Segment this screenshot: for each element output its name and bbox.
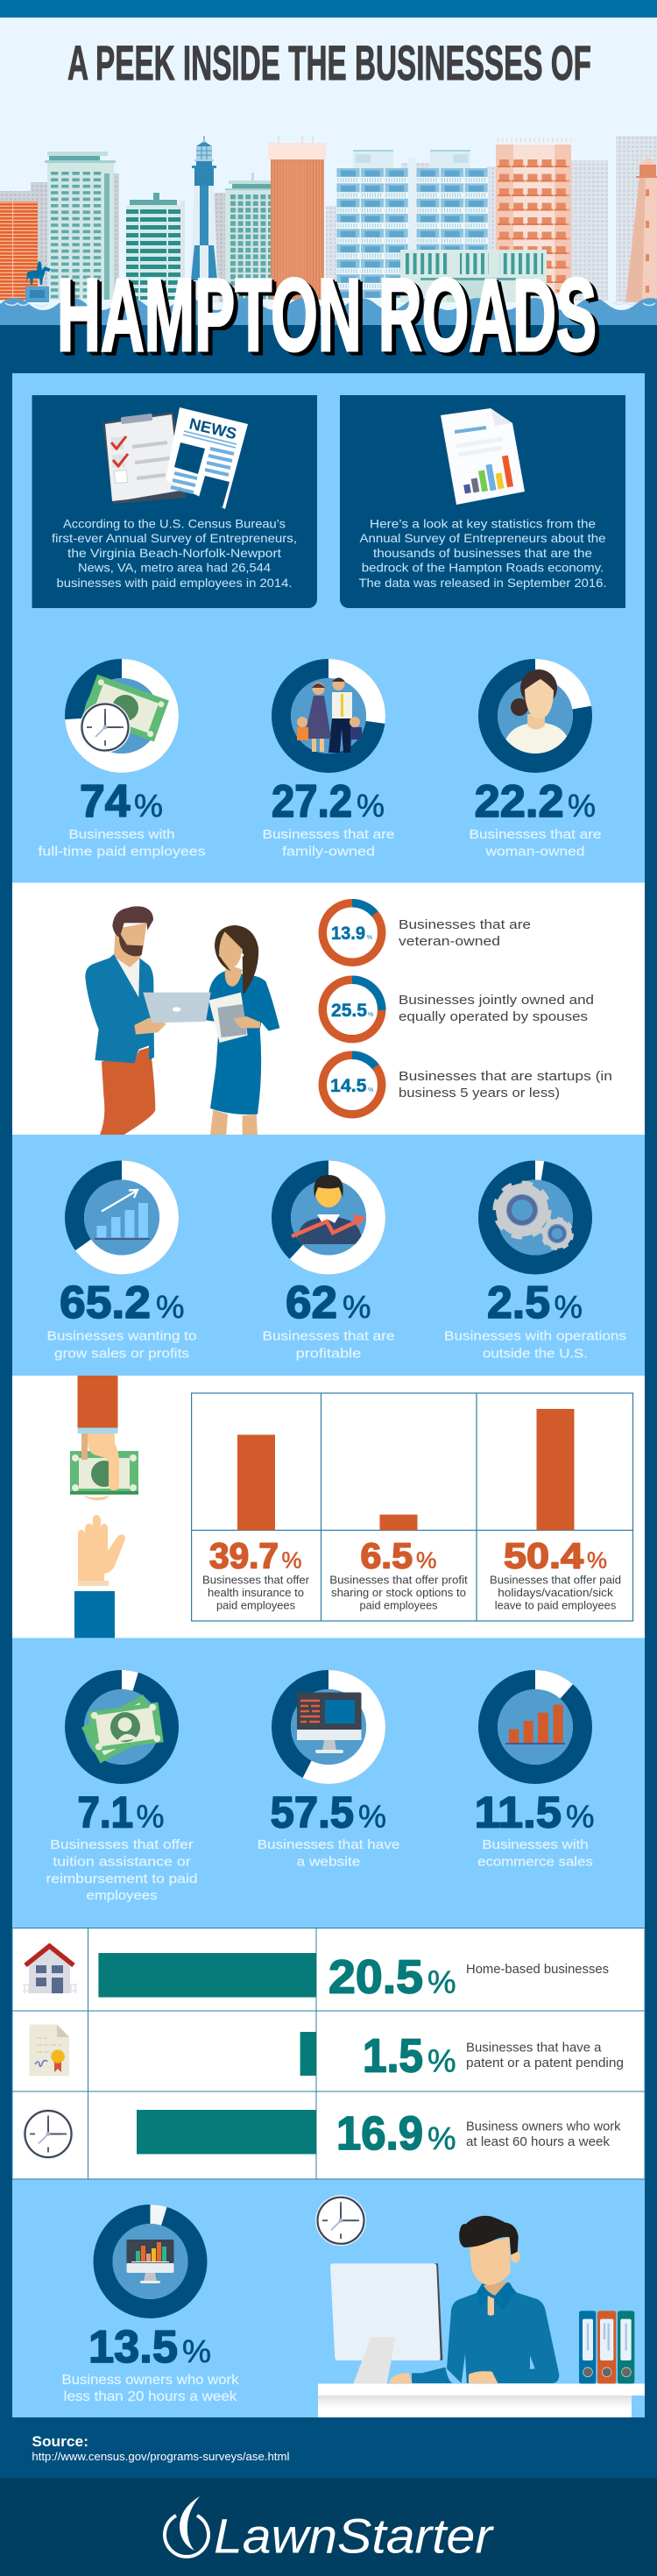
- logo wordmark: LawnStarter: [214, 2508, 494, 2564]
- coral hotel: [496, 140, 571, 294]
- panel: employee benefits: [12, 1376, 645, 1638]
- caption: [470, 827, 601, 860]
- caption: Businesses that are: [263, 1329, 394, 1344]
- bar: 39.7%: [237, 1435, 275, 1530]
- text: census bureau intro: first-ever Annual Survey of Entrepreneurs,: [52, 531, 297, 545]
- value 6.5%: %: [416, 1546, 436, 1573]
- lighthouse: [189, 136, 219, 302]
- source citation: http://www.census.gov/programs-surveys/ase.html: [32, 2451, 289, 2463]
- text: census bureau intro: businesses with paid employees in 2014.: [56, 576, 293, 590]
- value 65.2%: 65.2: [60, 1277, 151, 1328]
- value 20.5%: %: [427, 1964, 456, 2000]
- icon: family: [297, 678, 362, 753]
- value 39.7%: 39.7: [209, 1535, 279, 1575]
- donut chart 57.5%: [281, 1680, 376, 1774]
- value 50.4%: %: [587, 1546, 607, 1573]
- value 50.4%: 50.4: [504, 1535, 583, 1575]
- caption: Businesses wanting to: [47, 1329, 196, 1344]
- icon: orange bar chart: [505, 1705, 565, 1744]
- label: [399, 993, 594, 1024]
- caption: profit sharing: [329, 1574, 468, 1612]
- text: key statistics intro: The data was released in September 2016.: [359, 576, 606, 590]
- value 2.5%: %: [554, 1289, 583, 1325]
- coral tower: [268, 136, 326, 300]
- caption: health insurance: health insurance to: [208, 1586, 304, 1599]
- city skyline: [0, 136, 657, 302]
- orange building left: [0, 202, 38, 300]
- text: key statistics intro: bedrock of the Hampton Roads economy.: [362, 561, 604, 575]
- stat: 27.2% family-owned: [263, 669, 394, 860]
- illustration: man at desk: [330, 2216, 634, 2384]
- value 2.5%: 2.5: [487, 1277, 550, 1328]
- blue hotels: [336, 150, 489, 298]
- caption: health insurance: paid employees: [216, 1598, 295, 1612]
- caption: grow sales or profits: [54, 1346, 189, 1361]
- caption: Businesses that are: [263, 827, 394, 842]
- icon: house: [23, 1946, 77, 1993]
- caption: Businesses that are: [470, 827, 601, 842]
- caption: Businesses with operations: [444, 1329, 626, 1344]
- icon: woman: [506, 669, 567, 754]
- logo icon: [165, 2496, 208, 2557]
- caption: Businesses that offer: [50, 1837, 194, 1852]
- text: key statistics intro: Annual Survey of Entrepreneurs about the: [359, 531, 606, 545]
- stat: 7.1% tuition assistance: [46, 1680, 198, 1903]
- icon: report document: [441, 408, 525, 505]
- label: business 5 years or less): [399, 1086, 560, 1100]
- label: at least 60 hours a week: [466, 2134, 610, 2149]
- value 62%: [286, 1277, 371, 1328]
- icon: money and clock: [80, 675, 169, 753]
- donut chart 27.2%: [281, 669, 376, 763]
- ring 13.9%: [322, 903, 382, 962]
- caption: outside the U.S.: [483, 1346, 588, 1361]
- value 39.7%: %: [282, 1546, 301, 1573]
- donut chart 65.2%: [74, 1171, 169, 1265]
- value: 13.9: [331, 924, 365, 944]
- label: [466, 2120, 621, 2149]
- stat: 14.5% startups: [322, 1055, 612, 1115]
- ring 14.5%: [322, 1055, 382, 1115]
- caption: [477, 1837, 593, 1869]
- value 20.5%: 20.5: [328, 1951, 423, 2004]
- top header background: [0, 0, 657, 329]
- icon: banknotes: [81, 1695, 164, 1763]
- striped building: [126, 193, 180, 300]
- stat: 11.5% ecommerce: [475, 1680, 594, 1869]
- donut chart 2.5%: [488, 1171, 583, 1265]
- illustration: hands exchanging money: [70, 1376, 138, 1638]
- top bar: [0, 0, 657, 18]
- source citation: Source:: [32, 2433, 88, 2450]
- caption: Businesses that have: [258, 1837, 399, 1852]
- caption: tuition assistance or: [53, 1854, 191, 1869]
- stat: 74% full-time paid employees: [39, 669, 205, 860]
- monitor: [330, 2263, 442, 2384]
- caption: Businesses with: [482, 1837, 589, 1852]
- value 6.5%: [361, 1535, 436, 1575]
- caption: a website: [297, 1854, 360, 1869]
- footer band: [0, 2478, 657, 2576]
- text: key statistics intro: [359, 516, 606, 590]
- value 50.4%: [504, 1535, 607, 1575]
- light blue content panel: [12, 373, 645, 2417]
- donut chart 62%: [281, 1171, 376, 1265]
- bar 1.5%: [300, 2032, 316, 2076]
- statue: [25, 261, 51, 302]
- value: %: [368, 1087, 373, 1093]
- donut chart 7.1%: [74, 1680, 169, 1774]
- value 74%: %: [134, 788, 163, 824]
- text: census bureau intro: [52, 516, 297, 590]
- label: patent or a patent pending: [466, 2056, 624, 2070]
- caption: ecommerce sales: [477, 1854, 593, 1869]
- person: [390, 2216, 559, 2383]
- caption: [263, 827, 394, 860]
- row: patent: [30, 2025, 624, 2083]
- binders: [579, 2311, 634, 2384]
- caption: profit sharing: paid employees: [359, 1598, 438, 1612]
- label: Business owners who work: [466, 2120, 621, 2134]
- source citation: [32, 2433, 289, 2463]
- caption: [46, 1837, 198, 1903]
- row: home-based businesses: [23, 1946, 609, 2004]
- caption: [263, 1329, 394, 1361]
- teal grid building: [225, 173, 281, 300]
- caption: paid leave: holidays/vacation/sick: [498, 1586, 613, 1599]
- caption: full-time paid employees: [39, 845, 205, 860]
- label: Businesses that have a: [466, 2041, 602, 2056]
- value 1.5%: 1.5: [363, 2030, 423, 2083]
- caption: [258, 1837, 399, 1869]
- donut chart 13.5%: [103, 2214, 198, 2309]
- icon: wall clock: [315, 2195, 366, 2246]
- label: [399, 917, 531, 949]
- caption: paid leave: Businesses that offer paid: [490, 1574, 621, 1586]
- caption: [61, 2373, 240, 2404]
- panel: intro right: [340, 395, 625, 608]
- value 27.2%: 27.2: [272, 776, 352, 827]
- value: 25.5: [331, 1001, 367, 1021]
- label: [399, 1069, 612, 1100]
- donut chart 74%: [74, 669, 169, 763]
- label: Businesses that are startups (in: [399, 1069, 612, 1084]
- value 65.2%: %: [156, 1289, 184, 1325]
- stat: 25.5% jointly owned: [322, 980, 594, 1039]
- donut chart 22.2%: [488, 669, 583, 763]
- label: Businesses that are: [399, 917, 531, 932]
- stat: 2.5% operations outside the U.S.: [444, 1171, 626, 1361]
- text: census bureau intro: According to the U.S. Census Bureau’s: [63, 516, 286, 530]
- icon: businessman and profit arrow: [292, 1175, 365, 1244]
- caption: woman-owned: [484, 845, 585, 860]
- bar: 6.5%: [380, 1515, 417, 1531]
- caption: profit sharing: sharing or stock options to: [331, 1586, 466, 1599]
- icon: clipboard checklist: [102, 412, 186, 504]
- low teal building: [400, 250, 547, 302]
- logo: lawnstarter: [165, 2496, 494, 2564]
- text: key statistics intro: Here’s a look at key statistics from the: [370, 516, 596, 530]
- value 57.5%: 57.5: [271, 1788, 354, 1837]
- teal tower: [45, 152, 116, 300]
- text: key statistics intro: thousands of businesses that are the: [373, 546, 592, 560]
- value 27.2%: %: [357, 788, 385, 824]
- label: equally operated by spouses: [399, 1009, 588, 1024]
- icon: computer monitor: [297, 1693, 361, 1753]
- value 74%: 74: [80, 776, 131, 827]
- text: census bureau intro: News, VA, metro area had 26,544: [78, 561, 271, 575]
- stat: 57.5% have a website: [258, 1680, 399, 1869]
- donut chart 11.5%: [488, 1680, 583, 1774]
- bar 16.9%: [137, 2110, 316, 2154]
- value 2.5%: [487, 1277, 583, 1328]
- stat: 13.5% under 20 hours: [61, 2214, 240, 2404]
- caption: health insurance: Businesses that offer: [202, 1574, 310, 1586]
- icon: monitor with chart: [126, 2240, 173, 2283]
- value 22.2%: 22.2: [475, 776, 564, 827]
- caption: paid leave: [490, 1574, 621, 1612]
- value 16.9%: %: [427, 2120, 456, 2156]
- caption: [47, 1329, 196, 1361]
- value 13.5%: 13.5: [88, 2322, 178, 2373]
- caption: [444, 1329, 626, 1361]
- value 16.9%: 16.9: [336, 2107, 423, 2160]
- wave highlights: [5, 302, 655, 307]
- stat: 62% profitable: [263, 1171, 394, 1361]
- water: [0, 298, 657, 326]
- lighthouse right: [625, 157, 657, 302]
- caption: Businesses with: [68, 827, 175, 842]
- label: [466, 2041, 624, 2070]
- stat: 13.9% veteran-owned: [322, 903, 531, 962]
- ring 25.5%: [322, 980, 382, 1039]
- caption: Business owners who work: [61, 2373, 240, 2388]
- value 7.1%: %: [137, 1799, 165, 1835]
- caption: reimbursement to paid: [46, 1872, 198, 1886]
- value 1.5%: %: [427, 2043, 456, 2079]
- value 11.5%: [475, 1788, 594, 1837]
- value 62%: 62: [286, 1277, 337, 1328]
- value: %: [368, 1012, 373, 1018]
- text: census bureau intro: the Virginia Beach-Norfolk-Newport: [67, 546, 281, 560]
- caption: profitable: [296, 1346, 361, 1361]
- caption: family-owned: [282, 845, 375, 860]
- caption: less than 20 hours a week: [64, 2389, 237, 2404]
- icon: newspaper: NEWS: [187, 414, 238, 442]
- illustration: business couple: [85, 906, 279, 1135]
- value 11.5%: %: [566, 1799, 594, 1835]
- row: 60 hours: [23, 2107, 621, 2160]
- value 57.5%: %: [358, 1799, 386, 1835]
- bar chart table: [192, 1393, 632, 1621]
- caption: [39, 827, 205, 860]
- panel: intro left: [32, 395, 317, 608]
- icon: gears: [496, 1184, 572, 1249]
- value: %: [367, 935, 372, 941]
- icon: certificate: [30, 2025, 69, 2076]
- value 13.5%: %: [182, 2333, 211, 2369]
- bar: 50.4%: [536, 1409, 575, 1530]
- bar 20.5%: [98, 1953, 316, 1998]
- value: 14.5: [330, 1076, 367, 1096]
- value 62%: %: [343, 1289, 371, 1325]
- icon: newspaper: [166, 407, 248, 509]
- desk: [318, 2383, 645, 2417]
- label: Businesses jointly owned and: [399, 993, 594, 1008]
- stat: 65.2% grow sales: [47, 1171, 196, 1361]
- icon: wall clock: [23, 2108, 74, 2159]
- icon: growth chart: [95, 1190, 150, 1240]
- panel: teal bar table: [12, 1928, 645, 2179]
- value 6.5%: 6.5: [361, 1535, 413, 1575]
- caption: profit sharing: Businesses that offer profit: [329, 1574, 468, 1586]
- value 22.2%: %: [568, 788, 596, 824]
- value 74%: [80, 776, 163, 827]
- value 11.5%: 11.5: [475, 1788, 562, 1837]
- label: veteran-owned: [399, 934, 500, 949]
- caption: health insurance: [202, 1574, 310, 1612]
- value 7.1%: 7.1: [77, 1788, 133, 1837]
- label: Home-based businesses: [466, 1962, 609, 1977]
- caption: employees: [86, 1888, 158, 1903]
- stat: 22.2% woman-owned: [470, 669, 601, 860]
- caption: paid leave: leave to paid employees: [495, 1598, 617, 1612]
- panel: ownership types: [12, 883, 645, 1135]
